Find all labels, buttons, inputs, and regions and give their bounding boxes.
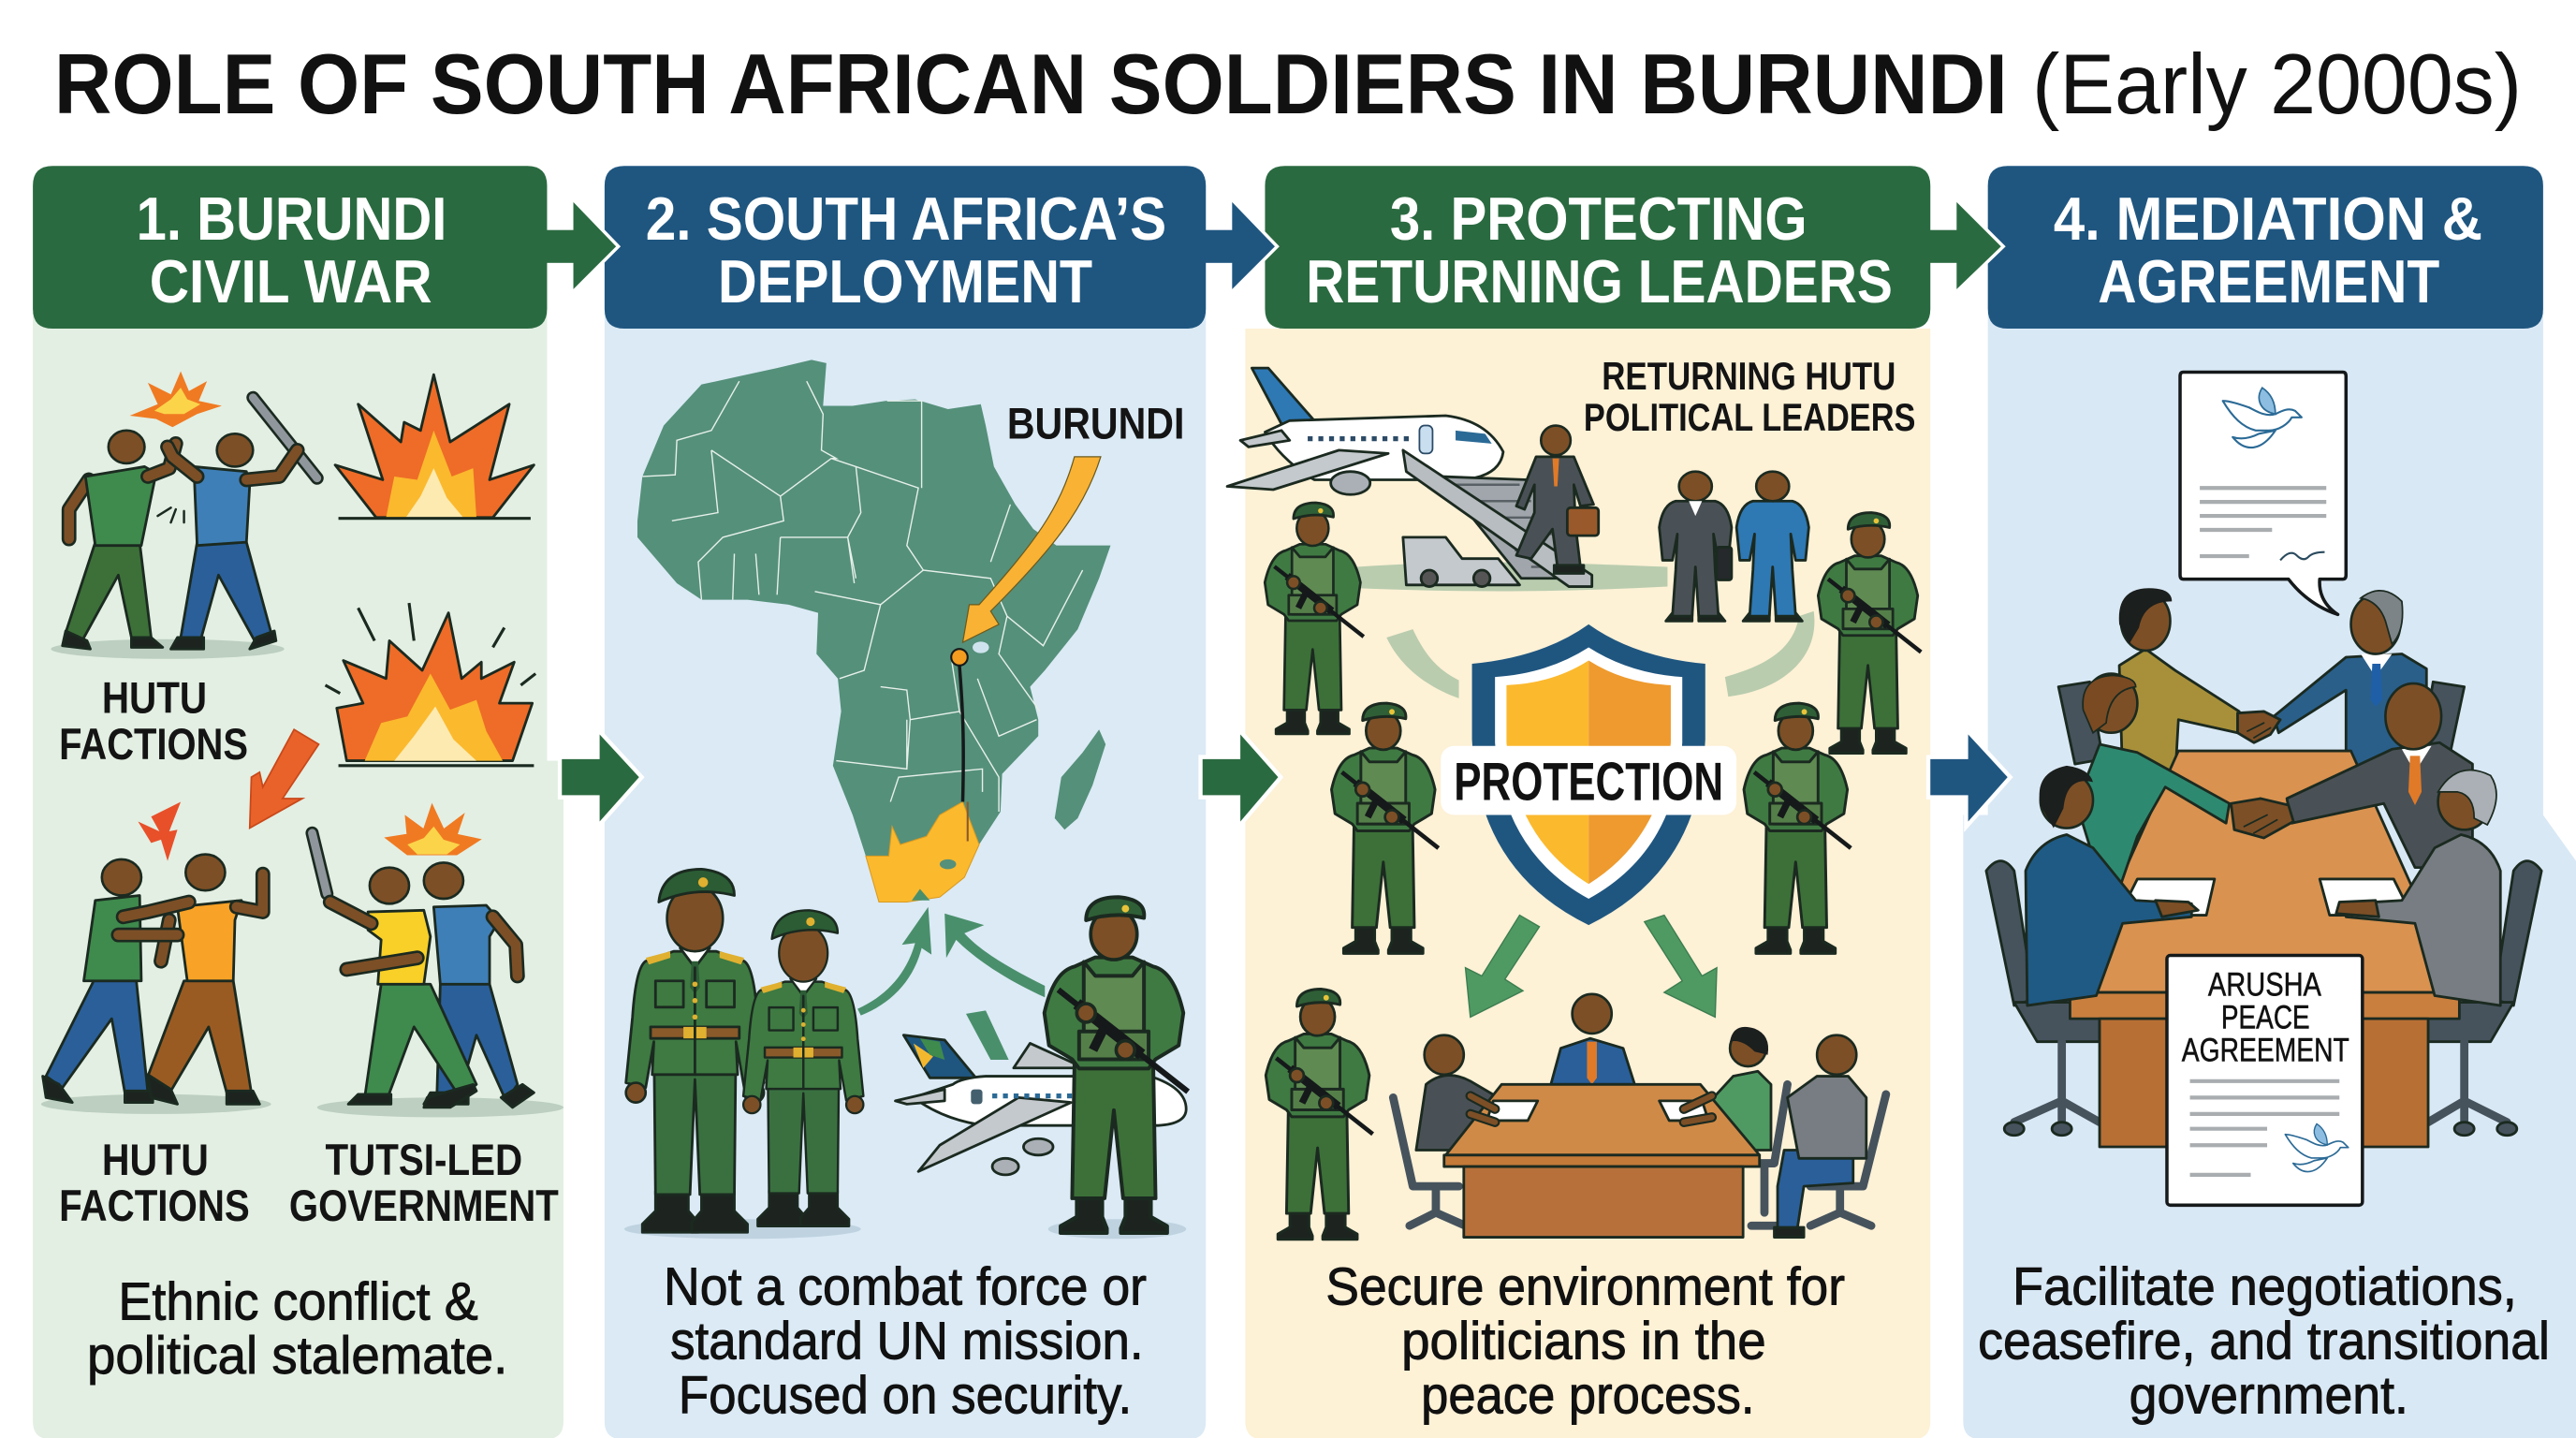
caption 1 bbox=[87, 1271, 507, 1385]
ground shadows bbox=[624, 1219, 1186, 1239]
title: (Early 2000s) bbox=[2032, 37, 2522, 132]
label: returning Hutu political leaders: POLITICAL LEADERS bbox=[1584, 395, 1915, 439]
header: 4 bbox=[1988, 166, 2543, 329]
icon: explosion upper bbox=[335, 374, 534, 519]
caption 4: government. bbox=[2130, 1365, 2408, 1424]
label: Burundi: BURUNDI bbox=[1007, 400, 1184, 449]
arrow: middle 1 to 2 bbox=[562, 734, 639, 822]
icon: plane South African bbox=[896, 1035, 1186, 1175]
icon: fighters, green and blue bbox=[51, 372, 317, 659]
arrows: down to meeting bbox=[1466, 916, 1717, 1017]
arrow: middle 3 to 4 bbox=[1930, 734, 2008, 822]
label: Hutu factions lower bbox=[59, 1136, 250, 1231]
speech bubble document bbox=[2180, 373, 2346, 614]
icon: explosion lower bbox=[326, 603, 535, 766]
panel body bbox=[33, 312, 564, 1438]
arrow: header 2 to 3 bbox=[1201, 202, 1275, 289]
meeting chairs bbox=[1986, 682, 2541, 1136]
header: 1: 1. BURUNDI bbox=[137, 184, 446, 253]
caption 4 bbox=[1978, 1256, 2550, 1424]
arrow: middle 2 to 3 bbox=[1203, 734, 1278, 822]
document: Arusha Peace Agreement: ARUSHA bbox=[2208, 967, 2321, 1004]
arrow: header 3 to 4 bbox=[1925, 202, 2001, 289]
caption 3: peace process. bbox=[1421, 1365, 1754, 1424]
table bbox=[2070, 751, 2459, 1147]
panel: 3 Protecting returning leaders bbox=[1227, 166, 1930, 1438]
label: Tutsi-led government: GOVERNMENT bbox=[289, 1181, 559, 1231]
label: Hutu factions upper: HUTU bbox=[102, 674, 207, 724]
icon: officer 1 bbox=[626, 869, 764, 1232]
icon: shield bbox=[1472, 624, 1705, 925]
caption 4: ceasefire, and transitional bbox=[1978, 1311, 2550, 1370]
icon: plane bbox=[1227, 368, 1503, 494]
header: 1: CIVIL WAR bbox=[150, 247, 432, 315]
label: protection bbox=[1441, 746, 1736, 814]
header: 2: DEPLOYMENT bbox=[718, 247, 1092, 315]
label: Hutu factions lower: FACTIONS bbox=[59, 1181, 250, 1231]
person: olive shirt bbox=[2119, 588, 2239, 777]
person: grey suit front bbox=[2336, 770, 2500, 1005]
person: blue suit, grey hair bbox=[2274, 591, 2426, 772]
handshake: upper bbox=[2237, 712, 2280, 742]
panel body bbox=[1245, 329, 1930, 1438]
caption 3: Secure environment for bbox=[1325, 1256, 1845, 1315]
header: 4: 4. MEDIATION & bbox=[2054, 184, 2482, 253]
label: protection: PROTECTION bbox=[1454, 753, 1723, 813]
header: 3: RETURNING LEADERS bbox=[1306, 247, 1893, 315]
panel body bbox=[605, 312, 1206, 1438]
header: 3 bbox=[1265, 166, 1930, 329]
arrows: to South Africa bbox=[857, 888, 1045, 1060]
handshake: lower bbox=[2231, 799, 2293, 838]
caption 2: Focused on security. bbox=[679, 1365, 1132, 1424]
caption 1: Ethnic conflict & bbox=[118, 1271, 478, 1330]
panel body bbox=[1963, 312, 2576, 1438]
label: returning Hutu political leaders: RETURNING HUTU bbox=[1602, 354, 1895, 398]
label: Tutsi-led government: TUTSI-LED bbox=[326, 1136, 522, 1185]
arrow: to Burundi bbox=[962, 457, 1101, 642]
icon: fighters, green and orange bbox=[41, 801, 271, 1114]
panel: 4 Mediation and agreement bbox=[1963, 166, 2576, 1438]
person: teal shirt bbox=[2076, 674, 2230, 888]
title: ROLE OF SOUTH AFRICAN SOLDIERS IN BURUNDI bbox=[54, 37, 2008, 132]
document: Arusha Peace Agreement bbox=[2167, 956, 2363, 1205]
icon: fighters, yellow and blue bbox=[312, 805, 564, 1117]
panel: 1 Burundi civil war bbox=[33, 166, 564, 1438]
label: Hutu factions upper bbox=[59, 674, 248, 770]
header: 2: 2. SOUTH AFRICA’S bbox=[646, 184, 1166, 253]
panel: 2 South Africa's deployment bbox=[605, 166, 1206, 1438]
icon: meeting table bbox=[1393, 994, 1886, 1238]
document: Arusha Peace Agreement: AGREEMENT bbox=[2182, 1033, 2349, 1069]
arrow: header 1 to 2 bbox=[542, 202, 616, 289]
caption 1: political stalemate. bbox=[87, 1326, 507, 1385]
label: returning Hutu political leaders bbox=[1584, 354, 1915, 439]
label: Hutu factions upper: FACTIONS bbox=[59, 720, 248, 770]
caption 4: Facilitate negotiations, bbox=[2012, 1256, 2517, 1315]
caption 2: Not a combat force or bbox=[664, 1256, 1147, 1315]
header: 2 bbox=[605, 166, 1206, 329]
icon: officer 2 bbox=[743, 910, 863, 1226]
label: Tutsi-led government bbox=[289, 1136, 559, 1231]
icon: boarding stairs bbox=[1403, 450, 1592, 587]
icon: soldier escort bbox=[1265, 503, 1921, 1240]
caption 2 bbox=[664, 1256, 1147, 1424]
label: Hutu factions lower: HUTU bbox=[102, 1136, 209, 1185]
icon: leader on stairs bbox=[1516, 426, 1599, 574]
icon: armed soldier bbox=[1045, 897, 1188, 1233]
caption 2: standard UN mission. bbox=[670, 1311, 1144, 1370]
caption 3 bbox=[1325, 1256, 1845, 1424]
icon: two leaders bbox=[1660, 472, 1808, 621]
map: Africa bbox=[637, 360, 1110, 902]
document: Arusha Peace Agreement: PEACE bbox=[2221, 1000, 2310, 1036]
path: walkway bands bbox=[1357, 563, 1814, 698]
person: dark suit, orange tie bbox=[2287, 683, 2472, 868]
header: 1 bbox=[33, 166, 547, 329]
caption 3: politicians in the bbox=[1401, 1311, 1766, 1370]
person: blue jacket front bbox=[2026, 766, 2198, 1005]
header: 4: AGREEMENT bbox=[2098, 247, 2439, 315]
header: 3: 3. PROTECTING bbox=[1390, 184, 1808, 253]
arrow: orange bbox=[250, 729, 318, 829]
